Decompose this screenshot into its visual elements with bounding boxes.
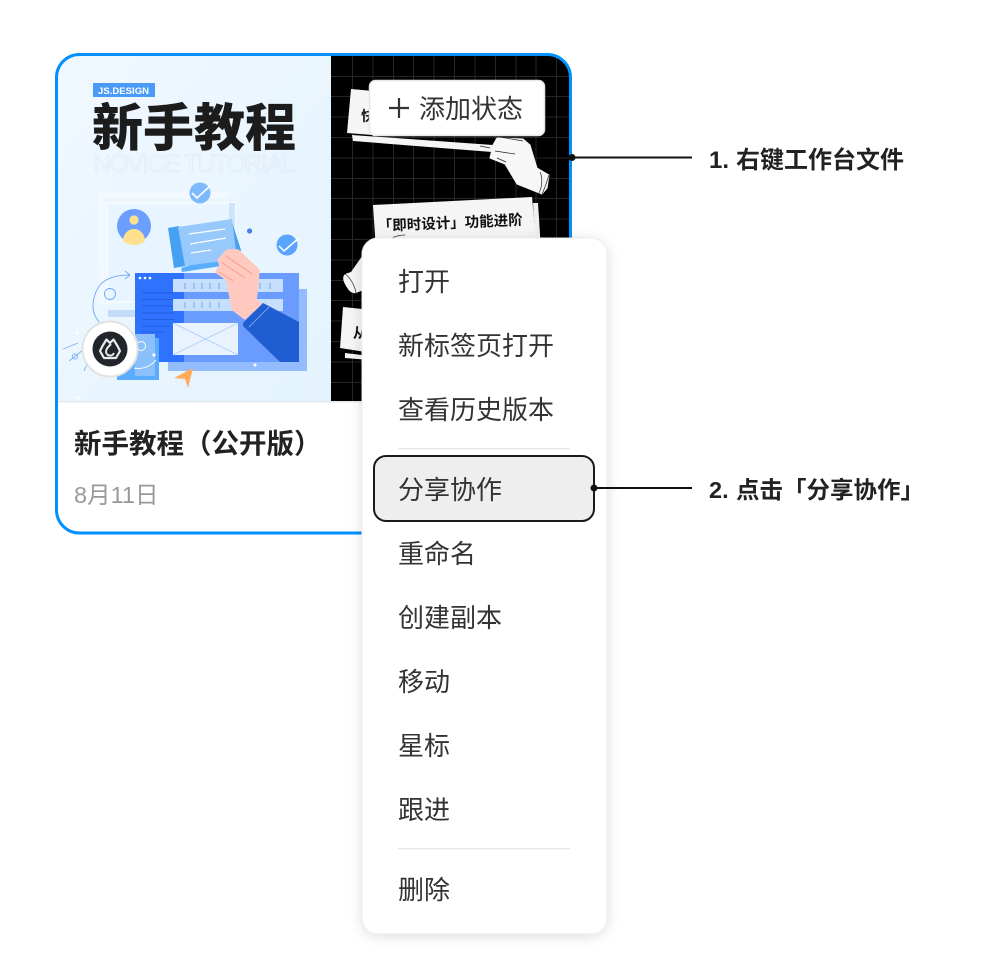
callout 1 label: 右键工作台文件 [736, 146, 904, 174]
poster badge: JS.DESIGN [98, 86, 149, 97]
sticky note [117, 334, 159, 380]
menu item highlighted: share [374, 456, 594, 521]
paper sheet middle [373, 197, 540, 238]
menu item: follow: 跟进 [398, 795, 450, 825]
leader line 2 [590, 484, 692, 492]
hand top [480, 137, 549, 194]
card date: 8月11日 [74, 482, 158, 508]
icon: cursor arrow [174, 368, 193, 388]
paper sheet top: 快 [361, 108, 375, 124]
poster subtitle outline: NOVICE TUTORIAL [93, 150, 295, 178]
paper sheet middle: 「即时设计」功能进阶 [377, 211, 524, 235]
hand and sleeve [216, 250, 299, 362]
add state button [370, 80, 544, 136]
hand lower left [343, 257, 362, 294]
poster: dark grid panel [331, 55, 571, 401]
context menu [362, 238, 607, 934]
menu item: duplicate: 创建副本 [398, 603, 502, 633]
button label: 添加状态 [419, 94, 523, 124]
paper sheet top [347, 89, 372, 135]
icon: check badge right [276, 234, 299, 256]
app window [135, 273, 307, 371]
menu item: star: 星标 [398, 731, 450, 761]
card title: 新手教程（公开版） [74, 428, 322, 459]
callout 1 [568, 146, 904, 174]
icon: plus [389, 98, 409, 118]
callout 2 [590, 477, 924, 503]
menu item: open: 打开 [398, 267, 450, 297]
file card [56, 54, 571, 533]
icon: avatar [117, 209, 151, 245]
menu item: version history: 查看历史版本 [398, 395, 554, 425]
leader line 1 [568, 154, 692, 161]
menu item: rename: 重命名 [398, 539, 476, 569]
callout 2 label: 点击「分享协作」 [736, 477, 924, 503]
callout 1 label: 1. [709, 147, 729, 174]
poster: novice tutorial cover [56, 55, 331, 401]
paper sheet bottom: 从 [353, 325, 367, 341]
menu item: move: 移动 [398, 667, 450, 697]
menu item highlighted: share: 分享协作 [398, 475, 502, 505]
illustration [63, 182, 307, 400]
floating document [168, 219, 241, 272]
poster badge [93, 83, 155, 97]
paper strip [352, 135, 493, 152]
poster title: 新手教程 [92, 100, 296, 157]
menu item: open in new tab: 新标签页打开 [398, 331, 554, 361]
callout 2 label: 2. [709, 477, 729, 503]
paper sheet bottom [340, 307, 362, 360]
icon: logo badge [82, 322, 138, 376]
icon: check badge top [190, 182, 210, 204]
menu item: delete: 删除 [398, 875, 450, 905]
